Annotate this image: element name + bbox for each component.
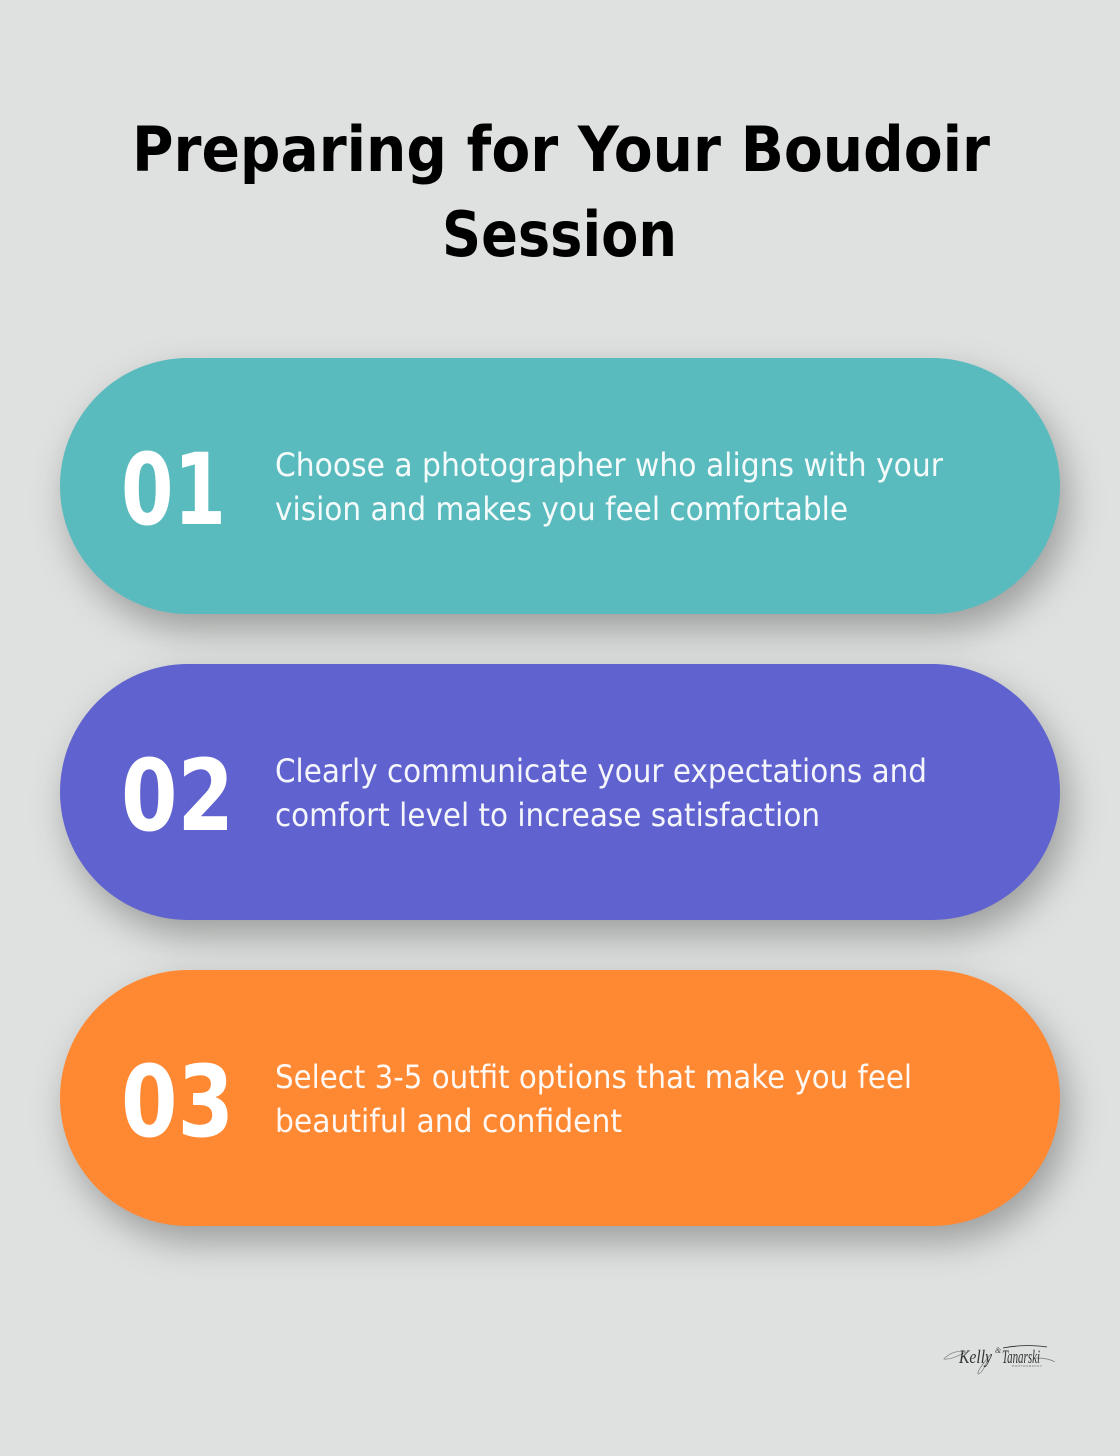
title: [132, 113, 990, 271]
title: Preparing for Your Boudoir: [132, 113, 990, 186]
step 03 text: Select 3-5 outfit options that make you feel: [275, 1058, 912, 1096]
logo: photographer signature: PHOTOGRAPHY: [1012, 1364, 1042, 1368]
step 02 text: [275, 752, 927, 834]
panel: step 03: [60, 970, 1068, 1242]
step 03 text: beautiful and confident: [275, 1102, 622, 1140]
panel: step 02: [60, 664, 1068, 936]
step number 03: 03: [121, 1045, 234, 1160]
step number 01: 01: [121, 433, 226, 548]
step 02 text: comfort level to increase satisfaction: [275, 796, 820, 834]
logo: photographer signature: &: [995, 1346, 1002, 1355]
step number 02: 02: [121, 739, 234, 854]
logo: photographer signature: [944, 1346, 1055, 1374]
panel: step 01: [60, 358, 1068, 630]
step 02 text: Clearly communicate your expectations and: [275, 752, 927, 790]
title: Session: [442, 198, 677, 271]
logo: photographer signature: Tanarski: [1002, 1347, 1040, 1368]
step 01 text: vision and makes you feel comfortable: [275, 490, 848, 528]
step 03 text: [275, 1058, 912, 1140]
logo: photographer signature: Kelly: [958, 1347, 992, 1368]
step 01 text: Choose a photographer who aligns with your: [275, 446, 944, 484]
step 01 text: [275, 446, 944, 528]
